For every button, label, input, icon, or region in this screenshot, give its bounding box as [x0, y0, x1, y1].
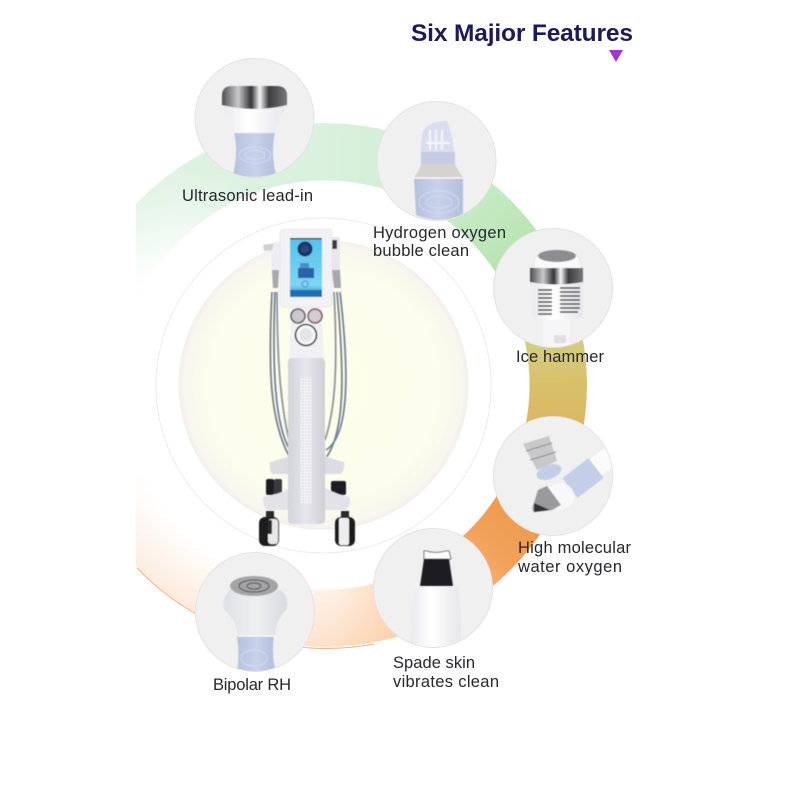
- icon: water oxygen handpiece: [523, 436, 618, 512]
- front base shelf: [263, 488, 350, 510]
- feature: hydrogen oxygen bubble clean: [373, 102, 506, 260]
- feature: high molecular water oxygen: [494, 416, 632, 576]
- thin white outer circle: [156, 218, 491, 553]
- icon: purple down triangle: [609, 50, 623, 62]
- feature: ultrasonic lead-in: [182, 58, 314, 205]
- label: Bipolar RH: [213, 676, 291, 694]
- orange outer edge line of ring: [137, 568, 374, 648]
- icon: bipolar handpiece: [224, 576, 287, 672]
- title: Six Majior Features: [411, 20, 633, 47]
- column: [288, 358, 325, 524]
- circle badge: [494, 228, 612, 348]
- control knobs: [291, 309, 322, 346]
- label: High molecular: [518, 539, 632, 557]
- circle badge: [377, 102, 496, 220]
- machine head: [280, 229, 332, 307]
- touch screen: [290, 238, 322, 297]
- label line 2: vibrates clean: [393, 673, 499, 691]
- circle badge: [196, 552, 314, 672]
- icon: spade skin scrubber: [419, 550, 460, 647]
- feature: bipolar RH: [196, 552, 314, 694]
- right handpiece: [331, 237, 341, 288]
- icon: hydrogen handpiece: [413, 121, 464, 220]
- front right wheel: [335, 511, 355, 546]
- circle badge: [195, 58, 314, 178]
- icon: ultrasonic handpiece: [222, 86, 287, 178]
- feature: ice hammer: [494, 228, 612, 366]
- gradient ring band: [136, 123, 587, 647]
- treatment machine: [259, 229, 355, 546]
- circle badge: [494, 416, 612, 536]
- label: Spade skin: [393, 654, 475, 672]
- pedestal: [289, 305, 324, 358]
- rear base shelf and upper wheels: [266, 456, 346, 495]
- icon: ice hammer handpiece: [530, 250, 583, 350]
- feature: spade skin vibrates clean: [374, 528, 499, 691]
- circle badge: [374, 528, 492, 648]
- front left wheel: [259, 511, 279, 546]
- central glow circle: [178, 240, 468, 530]
- left handpiece: [263, 241, 280, 288]
- label: Ultrasonic lead-in: [182, 187, 313, 205]
- label: Hydrogen oxygen: [373, 224, 506, 242]
- label: Ice hammer: [516, 348, 604, 366]
- label line 2: water oxygen: [517, 558, 622, 576]
- cables: [270, 292, 346, 458]
- perforated dot strip: [300, 377, 312, 503]
- label line 2: bubble clean: [373, 242, 469, 260]
